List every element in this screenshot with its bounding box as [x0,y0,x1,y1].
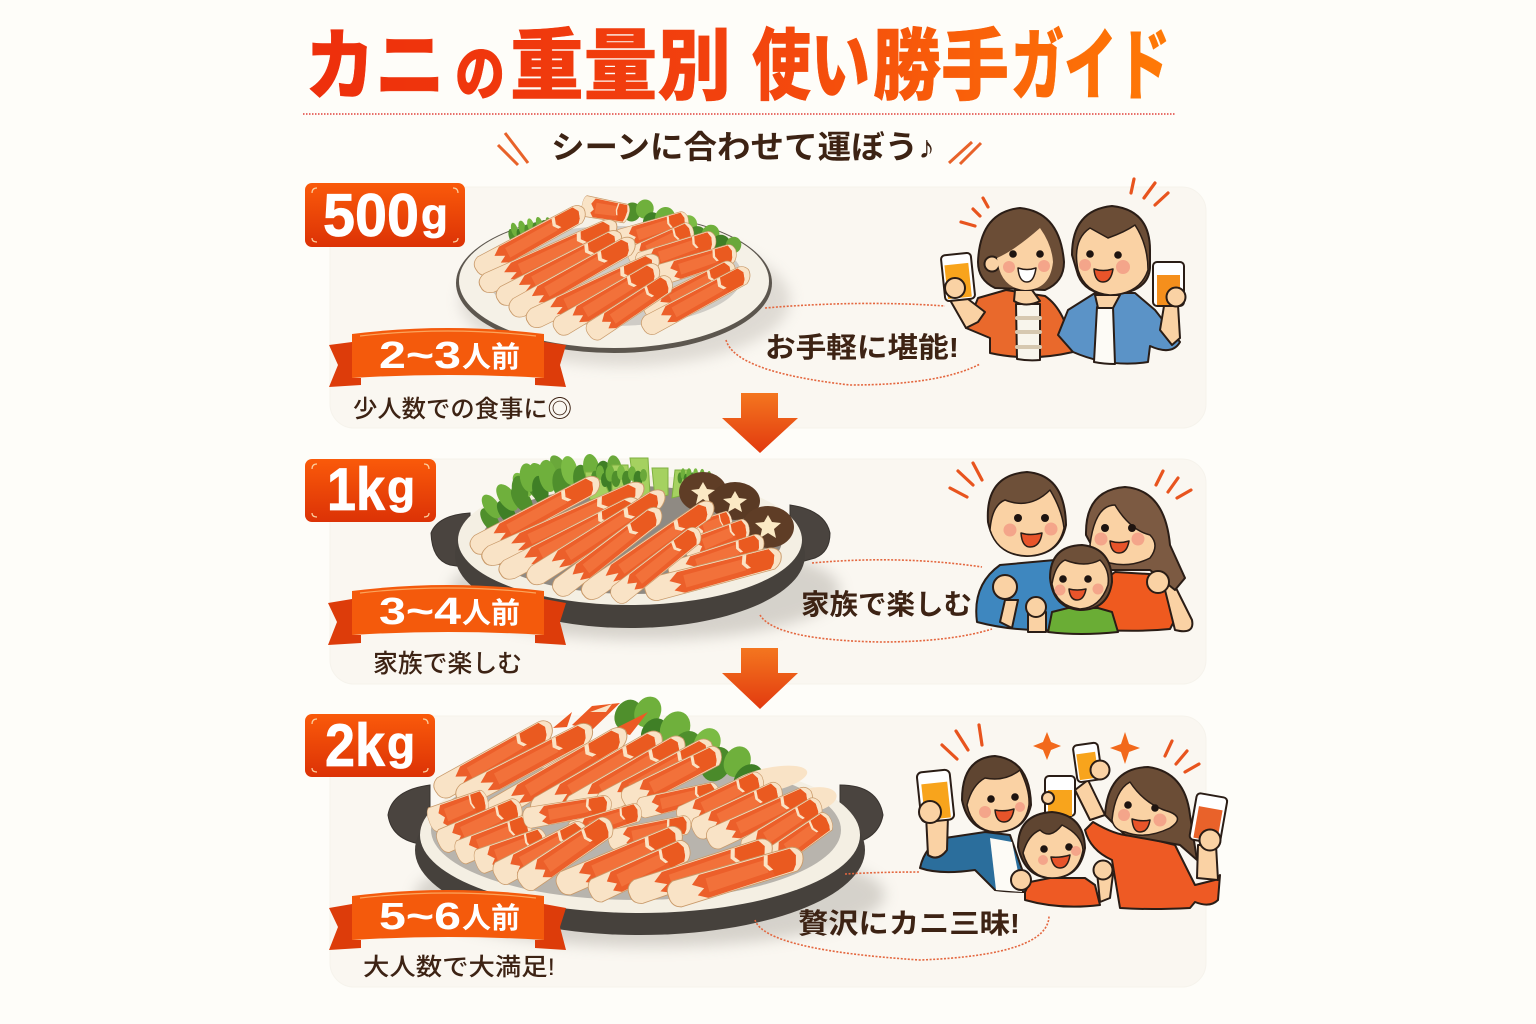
title: 使い [752,22,870,110]
center glass [1042,776,1075,816]
arrow [722,648,798,709]
lettuce [470,447,711,538]
speech oval [726,303,980,385]
ribbon: 2~3人前: 2~3 [379,335,461,377]
illustration: family cheering [950,463,1192,634]
badge: 1kg: 1k [327,456,386,523]
child [1026,545,1118,634]
panel: 500g [330,179,1206,428]
badge: 500g: 500 [323,182,419,249]
title: カニ [305,22,445,110]
speech oval: 贅沢にカニ三昧! [798,908,1020,939]
mother [1073,742,1228,909]
ribbon: 3~4人前: 人前 [462,597,520,630]
badge: 500g: g [421,190,448,239]
panel: 2kg [330,684,1228,987]
father [916,756,1031,892]
title [305,22,1170,110]
caption: 大人数で大満足! [363,954,555,981]
title: の [455,41,505,108]
speech oval: 家族で楽しむ [801,589,972,620]
ribbon: 3~4人前: 3~4 [379,591,461,633]
title: 勝手 [873,22,1009,110]
plate: 2kg crab legs [388,684,885,947]
man [1058,206,1186,364]
badge: 1kg: g [387,461,415,513]
mother [1085,487,1192,631]
child [1011,812,1113,907]
badge: 2kg [305,712,435,779]
badge: 500g [305,182,465,249]
arrow [722,393,798,453]
title: 重量別 [510,22,731,110]
ribbon: 5~6人前: 5~6 [379,896,461,938]
illustration: family toasting [916,725,1228,909]
mushrooms [679,472,794,548]
caption: 少人数での食事に◎ [353,396,572,423]
speech oval [760,560,992,642]
badge: 2kg: g [387,717,415,769]
badge: 2kg: 2k [325,712,386,779]
ribbon: 3~4人前 [328,585,566,645]
ribbon: 2~3人前: 人前 [462,341,520,374]
plate: 1kg crab legs with vegetables [431,447,840,640]
panel: 1kg [330,447,1206,684]
speech oval [755,872,1049,960]
caption: 家族で楽しむ [373,650,522,678]
ribbon: 2~3人前 [329,328,566,387]
title: ガイド [1011,22,1170,110]
ribbon: 5~6人前: 人前 [462,902,520,935]
illustration: couple with beer [941,179,1186,364]
speech oval: お手軽に堪能! [765,332,959,363]
subtitle: シーンに合わせて運ぼう♪ [551,129,935,165]
badge: 1kg [305,456,436,523]
ribbon: 5~6人前 [329,890,566,950]
plate: 500g crab legs [456,193,790,366]
father [976,472,1075,630]
woman [941,208,1073,360]
